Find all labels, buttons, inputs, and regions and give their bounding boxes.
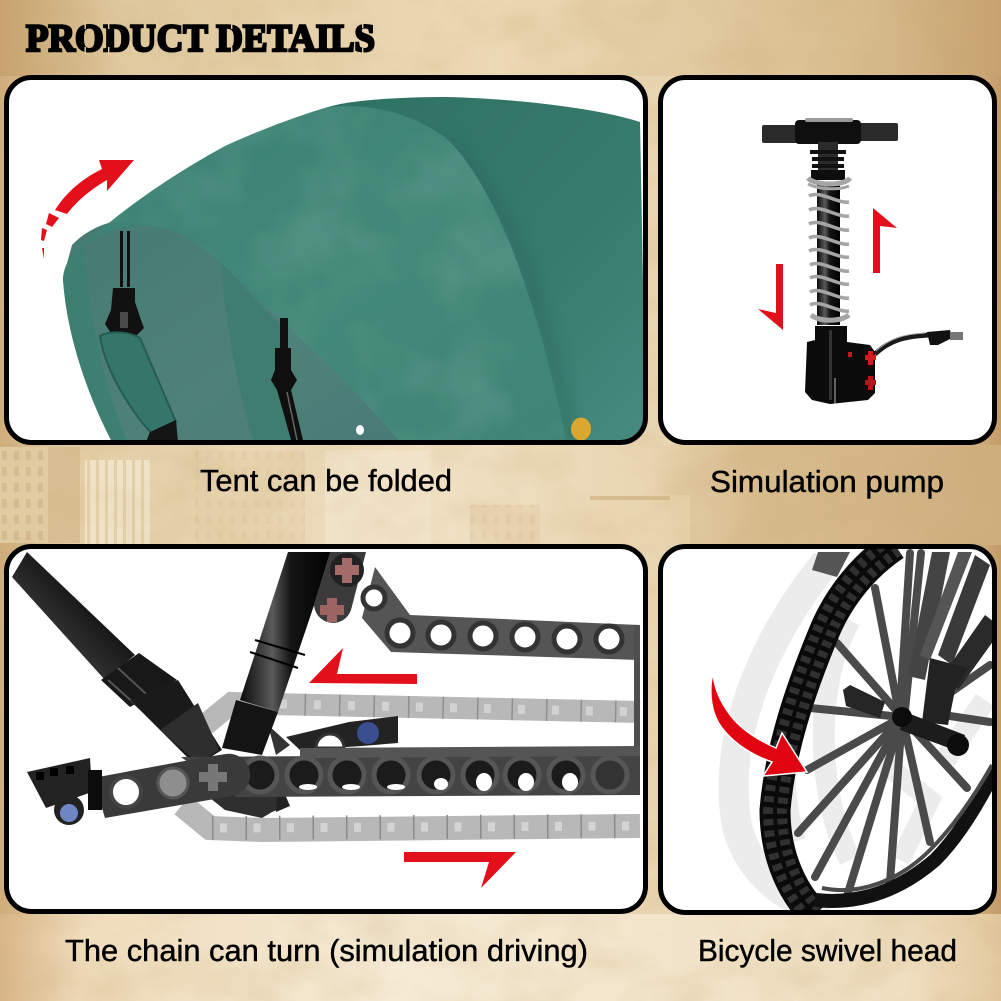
- left pole and connector: [105, 231, 144, 338]
- seam shadow: [540, 317, 574, 439]
- small drive parts: [268, 716, 398, 755]
- upper beam: [362, 567, 640, 750]
- arrow: swivel: [711, 672, 807, 776]
- pump body: [805, 326, 876, 404]
- panel: tent: [6, 78, 646, 442]
- chain and frame illustration: [12, 552, 640, 830]
- panel: wheel: [660, 545, 995, 915]
- caption: tent: Tent can be folded: [200, 463, 452, 498]
- fork: [843, 552, 994, 756]
- lighter left hem: [63, 248, 128, 442]
- pump spring: [808, 178, 850, 320]
- caption: wheel: Bicycle swivel head: [698, 933, 957, 968]
- wheel shadow: [734, 562, 985, 912]
- front canvas panel: [63, 106, 566, 442]
- panel: chain: [6, 546, 646, 912]
- lower beam: [181, 746, 640, 797]
- arrow: pump up: [873, 208, 897, 273]
- sprocket: [212, 796, 290, 818]
- arrow: chain right: [404, 852, 516, 888]
- pump rod: [817, 185, 840, 325]
- pump handle: [762, 118, 898, 180]
- pump hose: [875, 330, 963, 354]
- left strap sleeve: [100, 332, 176, 434]
- inner canvas: [63, 218, 405, 442]
- pedal: [27, 758, 102, 825]
- fender: [812, 552, 850, 577]
- tire: [775, 545, 995, 915]
- arrow: chain left: [309, 648, 417, 684]
- seat tube: [240, 552, 332, 712]
- caption: chain: The chain can turn (simulation driving): [65, 933, 588, 968]
- lower chain: [182, 805, 640, 830]
- tent illustration: [63, 97, 646, 442]
- seat tube base: [222, 700, 278, 755]
- yellow button: [571, 418, 591, 440]
- title: PRODUCT DETAILS: [26, 17, 375, 60]
- arrow: fold up: [41, 160, 134, 259]
- pedal arm: [93, 754, 250, 818]
- right pole and connector: [271, 318, 303, 440]
- wheel illustration: [734, 545, 995, 915]
- rivet hole: [356, 425, 364, 435]
- panel: pump: [660, 78, 994, 442]
- pump illustration: [762, 118, 963, 404]
- spokes: [798, 553, 990, 893]
- cross plate: [314, 552, 366, 623]
- rear diagonal tube: [12, 552, 222, 766]
- back canvas panel: [328, 97, 646, 442]
- arrow: pump down: [758, 264, 783, 330]
- caption: pump: Simulation pump: [710, 464, 944, 499]
- upper chain: [205, 703, 640, 725]
